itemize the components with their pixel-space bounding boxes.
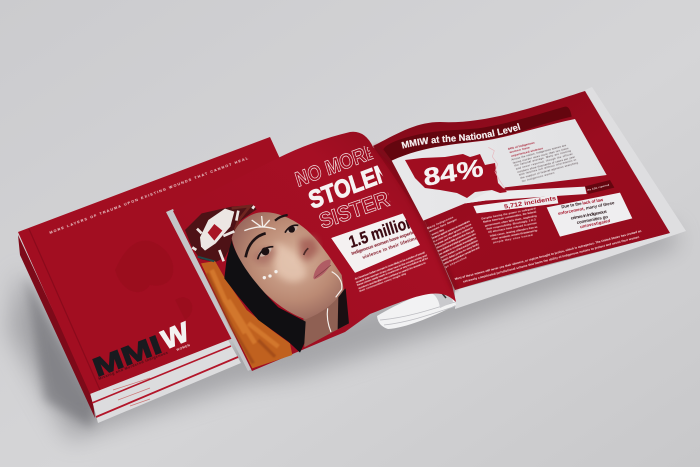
left page paragraph bbox=[354, 250, 432, 293]
cheek highlight bbox=[275, 243, 307, 282]
panel body text: and never reported, though the official bbox=[515, 152, 573, 171]
orange shawl bbox=[201, 261, 292, 368]
page block under right page bbox=[455, 87, 686, 309]
right page content bbox=[384, 106, 642, 284]
left column heading bbox=[426, 214, 460, 237]
panel red subheading: experienced violence bbox=[511, 146, 544, 158]
panel red subheading: 84% of Indigenous bbox=[508, 140, 535, 151]
beaded headband bbox=[192, 206, 254, 261]
neck bbox=[303, 288, 349, 347]
faint map texture bbox=[115, 240, 192, 320]
middle column text: their responsibility. Shockingly, 1 in 3 bbox=[486, 217, 536, 231]
panel red subheading: women have bbox=[508, 145, 530, 155]
eye shadow and nose bbox=[299, 237, 319, 262]
white data panel bbox=[392, 119, 607, 221]
left column heading: Many Indigenous bbox=[426, 215, 454, 230]
page edges bbox=[90, 340, 241, 423]
lips bbox=[313, 259, 331, 279]
incidents strip: 5,712 incidents bbox=[504, 196, 557, 211]
bottom text: Most of these women will never see their abusers, or rapists brought to justice, which is outrageous. The United States has created an bbox=[454, 229, 642, 281]
left column body: in power, and the statistics continue to bbox=[434, 226, 474, 247]
middle column text: other residents remain threatened by bbox=[491, 228, 538, 241]
bottom text: extremely complicated jurisdictional scheme that limits the ability of Indigenous nations to protect and assist their women bbox=[463, 235, 640, 284]
SISTERS: SISTERS bbox=[316, 182, 405, 234]
STOLEN: STOLEN bbox=[305, 158, 394, 215]
panel body text: the national average. Many are missing bbox=[514, 149, 572, 168]
left page paragraph: An American Indian woman is more likely to be a victim of sexual bbox=[354, 250, 426, 281]
left column body: show just how little protection they get bbox=[436, 229, 475, 250]
left page white edge bbox=[166, 209, 254, 371]
curled pages bbox=[377, 284, 456, 329]
middle column text bbox=[481, 206, 541, 246]
cover logo bbox=[89, 316, 193, 383]
middle column text: government often fails them, neglecting bbox=[484, 213, 537, 227]
left column heading: every day bbox=[431, 227, 445, 236]
middle column text: people they once trusted bbox=[493, 233, 533, 245]
white band under panel bbox=[465, 187, 587, 203]
source badge: the CDC reported bbox=[587, 183, 610, 192]
left page paragraph: assault than women of any other race in the country today, and bbox=[355, 253, 428, 284]
left page bbox=[173, 132, 456, 371]
panel red subheading bbox=[507, 139, 544, 158]
black hair bbox=[224, 241, 306, 353]
front cover bbox=[18, 137, 345, 394]
left column body: while the perpetrators remain free and bbox=[443, 246, 481, 266]
callout box: crimes in Indigenous bbox=[570, 209, 608, 221]
callout box: Due to the lack of law bbox=[561, 197, 604, 209]
left column heading: women face danger bbox=[428, 217, 458, 234]
face bbox=[232, 212, 344, 319]
header title: MMIW at the National Level bbox=[401, 123, 520, 149]
nostril bbox=[304, 248, 308, 255]
panel body text: facing murder rates more than ten times bbox=[512, 146, 569, 165]
portrait painting bbox=[185, 205, 349, 368]
spine crease bbox=[29, 229, 100, 390]
panel body text: Across the nation, Indigenous women are bbox=[511, 143, 567, 162]
middle column text: Despite having the power to safeguard bbox=[481, 206, 536, 221]
middle column text: US attorneys have refused to pursue bbox=[488, 221, 538, 234]
shadows bbox=[8, 225, 680, 440]
left page paragraph: survivors and families who continue to search for answers in bbox=[357, 261, 426, 290]
callout box: uninvestigated bbox=[579, 218, 611, 229]
cover tagline: MORE LAYERS OF TRAUMA UPON EXISTING WOUNDS THAT CANNOT HEAL bbox=[49, 156, 249, 235]
incidents strip bbox=[473, 195, 558, 213]
cover logo: WOMEN bbox=[176, 343, 191, 352]
gutter shadow bbox=[375, 146, 455, 290]
left page paragraph: these crimes rarely reach a courtroom or any resolution at all for bbox=[356, 256, 429, 287]
statistic box: 1.5 million: violence in their lifetime bbox=[362, 235, 418, 260]
US map bbox=[405, 147, 507, 198]
right page bbox=[373, 91, 670, 290]
left column body: go unpunished bbox=[445, 256, 468, 269]
left column body bbox=[431, 220, 484, 269]
statistic box: 1.5 million: Indigenous women have experienced bbox=[351, 226, 424, 256]
panel body text bbox=[511, 141, 580, 184]
left page paragraph: their communities every single day bbox=[359, 271, 407, 293]
open magazine bbox=[166, 88, 686, 371]
panel body text: with families left without information or bbox=[518, 158, 577, 177]
panel body text: numbers show thousands of cases per year bbox=[517, 155, 575, 174]
statistic box: 1.5 million: 1.5 million bbox=[346, 212, 416, 252]
eyebrows bbox=[246, 233, 266, 257]
callout box: communities go bbox=[576, 214, 609, 225]
middle column text: tribal cases, leaving offenders free as bbox=[489, 224, 538, 238]
header band bbox=[383, 107, 572, 161]
84 percent figure: 84% bbox=[422, 155, 485, 192]
left page headline bbox=[294, 146, 391, 228]
lower magazine edge bbox=[18, 235, 95, 418]
eyes bbox=[257, 224, 298, 259]
left column body: across borders of land and jurisdiction bbox=[440, 239, 479, 259]
cover logo: MMI bbox=[89, 329, 165, 383]
middle column text: Native American communities, the federal bbox=[483, 210, 537, 224]
panel body text: the support of federal agencies searching bbox=[520, 161, 579, 180]
cover logo: W bbox=[158, 316, 193, 356]
scarf bbox=[185, 205, 257, 262]
source badge bbox=[585, 180, 614, 194]
panel body text: for Indigenous women bbox=[521, 170, 555, 183]
NO MORE: NO MORE bbox=[293, 139, 380, 192]
callout box: enforcement, many of these bbox=[558, 200, 615, 216]
left column body: is a crisis too often ignored by those bbox=[433, 223, 473, 243]
left column body: from federal and tribal governments who bbox=[437, 232, 477, 253]
left column body: which delays justice for every family bbox=[442, 243, 480, 262]
cover logo: Missing and Murdered Indigenous bbox=[98, 351, 168, 381]
statistic box: 1.5 million bbox=[331, 212, 424, 273]
white face paint bbox=[244, 216, 276, 231]
left column body: are unable to coordinate investigations bbox=[439, 236, 478, 256]
left column body: Violence against women on reservations bbox=[431, 220, 471, 240]
callout box bbox=[547, 193, 632, 237]
closed magazine stack bbox=[18, 137, 345, 423]
